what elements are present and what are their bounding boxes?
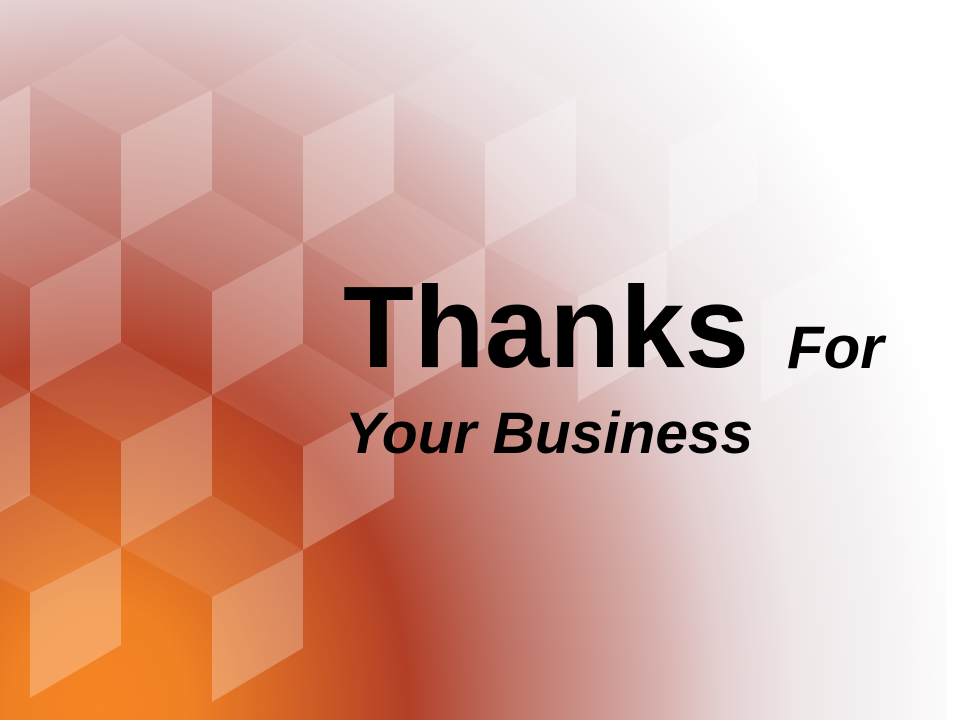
right edge strip — [947, 0, 960, 720]
title: Thanks For: Thanks — [343, 262, 749, 392]
right faces — [0, 85, 852, 702]
subtitle: Your Business: Your Business — [345, 401, 753, 466]
title: Thanks For: For — [787, 314, 887, 381]
top faces — [0, 35, 852, 597]
